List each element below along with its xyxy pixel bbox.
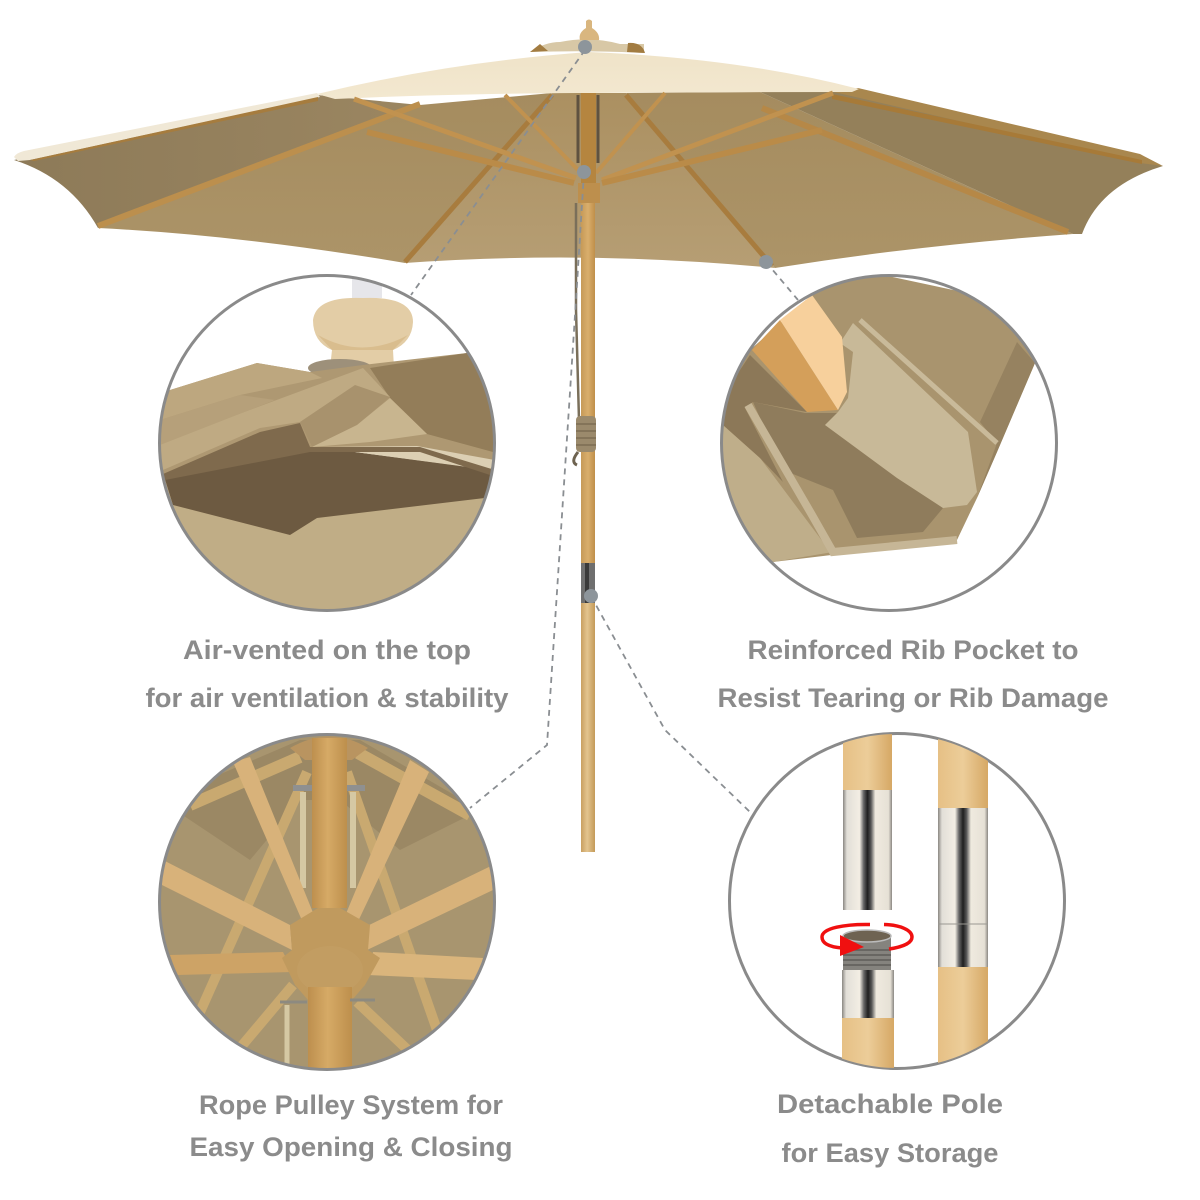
- pocket shadow: [753, 402, 943, 538]
- caption: rib pocket: Resist Tearing or Rib Damage: [718, 683, 1108, 713]
- callout leaders: [411, 50, 798, 812]
- pole: [581, 203, 595, 563]
- panel: detachable pole detail: [730, 730, 1064, 1077]
- caption: rib pocket: [718, 635, 1108, 713]
- rope wrap: [574, 416, 596, 465]
- caption: air vent: [146, 635, 508, 713]
- rope: [576, 203, 579, 420]
- fabric upper: [155, 353, 495, 475]
- panel: rope pulley detail: [150, 730, 510, 1077]
- canopy cream edge: [14, 93, 320, 161]
- pocket fabric: [700, 270, 1035, 562]
- canopy panel: right inner: [626, 92, 1073, 268]
- canopy panel: left outer: [14, 95, 420, 228]
- rotate arrow: [822, 924, 912, 956]
- finial: [580, 20, 599, 40]
- caption: rope pulley: [190, 1090, 512, 1162]
- callout dots: [577, 40, 773, 603]
- pole joint: [581, 563, 595, 603]
- left pole thread: [843, 930, 891, 974]
- pocket panel: [825, 323, 977, 508]
- canopy top panel: [317, 52, 859, 99]
- right pole: [938, 739, 988, 808]
- canopy panel: center: [405, 93, 775, 268]
- vent cap: [530, 39, 645, 53]
- caption: rope pulley: Rope Pulley System for: [199, 1090, 503, 1120]
- vent shadow: [163, 447, 493, 535]
- hub: [282, 908, 380, 1000]
- main ribs: [162, 757, 493, 980]
- left pole upper: [843, 730, 892, 790]
- pole: [290, 736, 368, 760]
- ribs: [98, 93, 1068, 266]
- ropes: [303, 792, 353, 888]
- caption: air vent: for air ventilation & stability: [146, 683, 508, 713]
- caption: rope pulley: Easy Opening & Closing: [190, 1132, 512, 1162]
- pulley pins: [280, 1000, 375, 1002]
- back ribs: [190, 753, 470, 1052]
- caption: detachable pole: [777, 1089, 1003, 1168]
- caption: air vent: Air-vented on the top: [183, 635, 471, 665]
- umbrella: [14, 20, 1163, 852]
- hub: [578, 183, 600, 203]
- caption: rib pocket: Reinforced Rib Pocket to: [748, 635, 1078, 665]
- panel: rib pocket detail: [720, 274, 1058, 612]
- wood rib: [752, 320, 838, 412]
- pulley chain: [578, 95, 598, 163]
- finial closeup: [352, 278, 382, 298]
- panel: air vent detail: [150, 270, 510, 620]
- pole upper: [581, 93, 596, 183]
- caption: detachable pole: for Easy Storage: [782, 1138, 998, 1168]
- canopy panel: right outer: [760, 90, 1163, 234]
- left pole lower: [842, 970, 894, 1020]
- vent sand: [165, 480, 484, 609]
- caption: detachable pole: Detachable Pole: [777, 1089, 1003, 1119]
- canopy panel: left inner: [98, 93, 552, 263]
